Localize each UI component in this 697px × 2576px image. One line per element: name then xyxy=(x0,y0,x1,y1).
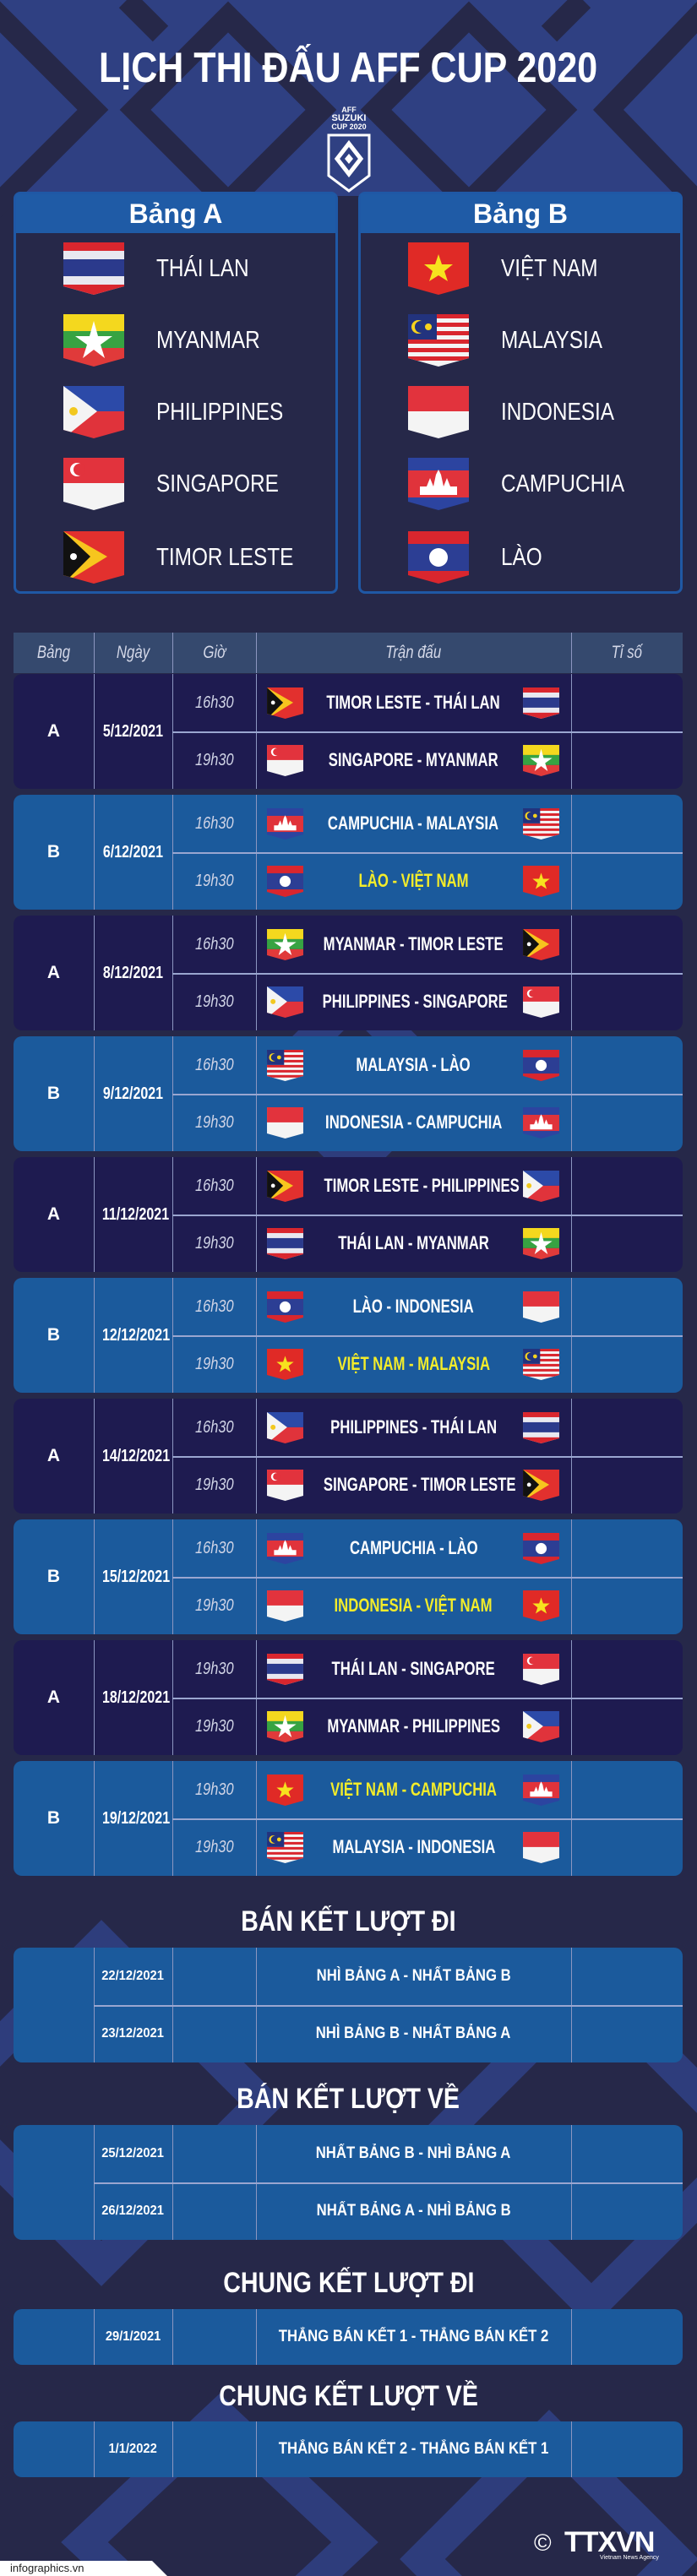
match block 18/12: 18/12/2021 xyxy=(102,1688,170,1707)
match block 12/12: 12/12/2021 xyxy=(102,1326,170,1345)
match block 11/12: THÁI LAN - MYANMAR xyxy=(338,1232,489,1253)
match block 9/12 xyxy=(14,1036,683,1151)
match block 6/12: 19h30 xyxy=(195,872,233,890)
match block 11/12: 11/12/2021 xyxy=(102,1205,169,1224)
match block 15/12: 15/12/2021 xyxy=(102,1568,170,1586)
team: Singapore: SINGAPORE xyxy=(156,470,279,497)
block: semi-final leg 1 xyxy=(14,1948,683,2062)
block: semi-final leg 2: 26/12/2021 xyxy=(102,2204,164,2218)
block: semi-final leg 2 xyxy=(14,2125,683,2240)
heading: Bảng B xyxy=(361,194,680,233)
match block 18/12: 19h30 xyxy=(195,1660,233,1678)
match block 18/12: 19h30 xyxy=(195,1717,233,1736)
team: Myanmar xyxy=(63,314,260,367)
block: final leg 1: 29/1/2021 xyxy=(106,2329,161,2344)
table header: Trận đấu xyxy=(385,643,441,662)
heading: Bán kết lượt đi: BÁN KẾT LƯỢT ĐI xyxy=(241,1905,456,1937)
logo: AFF Suzuki Cup 2020: SUZUKI xyxy=(332,113,366,123)
match block 5/12: 19h30 xyxy=(195,751,233,769)
match block 14/12 xyxy=(14,1399,683,1514)
block: final leg 2: THẮNG BÁN KẾT 2 - THẮNG BÁN KẾT 1 xyxy=(279,2440,548,2458)
block: final leg 2 xyxy=(14,2421,683,2477)
match block 9/12: 19h30 xyxy=(195,1113,233,1132)
match block 18/12: THÁI LAN - SINGAPORE xyxy=(332,1658,495,1679)
match block 12/12: VIỆT NAM - MALAYSIA xyxy=(337,1353,490,1374)
team: Việt Nam xyxy=(408,242,598,295)
match block 15/12: 19h30 xyxy=(195,1596,233,1615)
team: Campuchia xyxy=(408,458,624,510)
match block 14/12: 14/12/2021 xyxy=(102,1447,170,1465)
match block 11/12: 19h30 xyxy=(195,1234,233,1253)
logo: AFF Suzuki Cup 2020 xyxy=(328,106,370,193)
match block 5/12 xyxy=(14,674,683,789)
match block 6/12: 16h30 xyxy=(195,814,233,833)
match block 12/12: 19h30 xyxy=(195,1355,233,1373)
match block 19/12: 19h30 xyxy=(195,1780,233,1799)
table header: Ngày xyxy=(117,643,150,662)
team: Philippines: PHILIPPINES xyxy=(156,399,283,426)
team: Philippines xyxy=(63,386,283,438)
block: semi-final leg 1: NHÌ BẢNG A - NHẤT BẢNG B xyxy=(316,1967,511,1985)
match block 6/12 xyxy=(14,795,683,910)
match block 9/12: B xyxy=(47,1084,60,1103)
team: Timor Leste xyxy=(63,531,293,584)
match block 19/12: B xyxy=(47,1808,60,1828)
match block 15/12: B xyxy=(47,1567,60,1586)
match block 5/12: 16h30 xyxy=(195,693,233,712)
block: semi-final leg 1: 23/12/2021 xyxy=(102,2026,164,2041)
match block 6/12: B xyxy=(47,842,60,861)
heading: Bảng B: Bảng B xyxy=(473,198,568,229)
match block 8/12: 19h30 xyxy=(195,992,233,1011)
match block 8/12: 8/12/2021 xyxy=(103,964,163,982)
footer: infographics.vn: infographics.vn xyxy=(10,2562,84,2574)
block: final leg 1 xyxy=(14,2309,683,2365)
block: semi-final leg 2: 25/12/2021 xyxy=(102,2146,164,2160)
match block 11/12: A xyxy=(47,1204,60,1224)
match block 15/12: CAMPUCHIA - LÀO xyxy=(350,1537,477,1558)
table header: Bảng xyxy=(37,643,70,662)
match block 5/12: TIMOR LESTE - THÁI LAN xyxy=(327,692,500,713)
team: Indonesia xyxy=(408,386,614,438)
panel: Bảng A xyxy=(14,192,338,594)
team: Timor Leste: TIMOR LESTE xyxy=(156,544,293,571)
heading: Bảng A xyxy=(16,194,335,233)
logo: AFF Suzuki Cup 2020: AFF xyxy=(341,106,357,114)
match block 19/12 xyxy=(14,1761,683,1876)
match block 6/12: LÀO - VIỆT NAM xyxy=(358,870,469,891)
match block 6/12: CAMPUCHIA - MALAYSIA xyxy=(328,812,499,834)
match block 12/12 xyxy=(14,1278,683,1393)
match block 9/12: 16h30 xyxy=(195,1056,233,1074)
match block 5/12: SINGAPORE - MYANMAR xyxy=(329,749,498,770)
match block 8/12: A xyxy=(47,963,60,982)
logo: © TTXVN: © xyxy=(534,2530,552,2556)
match block 14/12: A xyxy=(47,1446,60,1465)
panel: Bảng B xyxy=(358,192,683,594)
table header xyxy=(14,633,683,673)
match block 9/12: 9/12/2021 xyxy=(103,1084,163,1103)
match block 8/12: 16h30 xyxy=(195,935,233,954)
match block 5/12: 5/12/2021 xyxy=(103,722,163,741)
heading: Bảng A: Bảng A xyxy=(129,198,222,229)
match block 19/12: VIỆT NAM - CAMPUCHIA xyxy=(330,1779,497,1800)
table header: Giờ xyxy=(203,643,226,662)
table header: Tỉ số xyxy=(612,643,642,662)
logo: © TTXVN: Vietnam News Agency xyxy=(600,2555,659,2561)
block: semi-final leg 1: NHÌ BẢNG B - NHẤT BẢNG A xyxy=(316,2024,511,2042)
match block 15/12: 16h30 xyxy=(195,1539,233,1557)
match block 18/12: A xyxy=(47,1687,60,1707)
logo: AFF Suzuki Cup 2020: CUP 2020 xyxy=(331,122,367,131)
match block 19/12: MALAYSIA - INDONESIA xyxy=(332,1836,495,1857)
match block 11/12: 16h30 xyxy=(195,1177,233,1195)
logo: © TTXVN xyxy=(534,2526,659,2561)
match block 6/12: 6/12/2021 xyxy=(103,843,163,861)
match block 15/12 xyxy=(14,1519,683,1634)
team: Thái Lan xyxy=(63,242,249,295)
team: Myanmar: MYANMAR xyxy=(156,327,260,354)
match block 12/12: LÀO - INDONESIA xyxy=(353,1296,474,1317)
match block 11/12: TIMOR LESTE - PHILIPPINES xyxy=(324,1175,520,1196)
team: Malaysia: MALAYSIA xyxy=(501,327,602,354)
match block 14/12: SINGAPORE - TIMOR LESTE xyxy=(324,1474,516,1495)
match block 15/12: INDONESIA - VIỆT NAM xyxy=(335,1595,493,1616)
team: Lào xyxy=(408,531,542,584)
team: Malaysia xyxy=(408,314,602,367)
match block 8/12 xyxy=(14,916,683,1030)
title: LỊCH THI ĐẤU AFF CUP 2020 xyxy=(99,44,598,91)
match block 8/12: PHILIPPINES - SINGAPORE xyxy=(323,991,508,1012)
block: semi-final leg 1: 22/12/2021 xyxy=(102,1969,164,1983)
team: Singapore xyxy=(63,458,279,510)
match block 12/12: 16h30 xyxy=(195,1297,233,1316)
heading: Chung kết lượt về: CHUNG KẾT LƯỢT VỀ xyxy=(219,2380,478,2412)
match block 18/12: MYANMAR - PHILIPPINES xyxy=(327,1715,500,1736)
match block 14/12: PHILIPPINES - THÁI LAN xyxy=(330,1416,497,1437)
heading: Chung kết lượt đi: CHUNG KẾT LƯỢT ĐI xyxy=(223,2267,474,2299)
heading: Bán kết lượt về: BÁN KẾT LƯỢT VỀ xyxy=(237,2083,460,2115)
match block 14/12: 19h30 xyxy=(195,1475,233,1494)
match block 14/12: 16h30 xyxy=(195,1418,233,1437)
match block 11/12 xyxy=(14,1157,683,1272)
block: final leg 2: 1/1/2022 xyxy=(109,2442,157,2456)
match block 9/12: INDONESIA - CAMPUCHIA xyxy=(325,1111,502,1133)
logo: © TTXVN: TTXVN xyxy=(564,2526,654,2558)
team: Lào: LÀO xyxy=(501,544,542,571)
team: Việt Nam: VIỆT NAM xyxy=(501,255,598,282)
match block 19/12: 19/12/2021 xyxy=(102,1809,170,1828)
match block 9/12: MALAYSIA - LÀO xyxy=(357,1054,471,1075)
match block 8/12: MYANMAR - TIMOR LESTE xyxy=(324,933,504,954)
block: semi-final leg 2: NHẤT BẢNG A - NHÌ BẢNG B xyxy=(316,2202,511,2220)
match block 18/12 xyxy=(14,1640,683,1755)
footer: infographics.vn xyxy=(0,2561,167,2576)
block: final leg 1: THẮNG BÁN KẾT 1 - THẮNG BÁN KẾT 2 xyxy=(279,2328,548,2345)
match block 5/12: A xyxy=(47,721,60,741)
team: Indonesia: INDONESIA xyxy=(501,399,614,426)
match block 12/12: B xyxy=(47,1325,60,1345)
match block 19/12: 19h30 xyxy=(195,1838,233,1856)
team: Thái Lan: THÁI LAN xyxy=(156,255,249,282)
team: Campuchia: CAMPUCHIA xyxy=(501,470,624,497)
block: semi-final leg 2: NHẤT BẢNG B - NHÌ BẢNG A xyxy=(316,2144,511,2162)
